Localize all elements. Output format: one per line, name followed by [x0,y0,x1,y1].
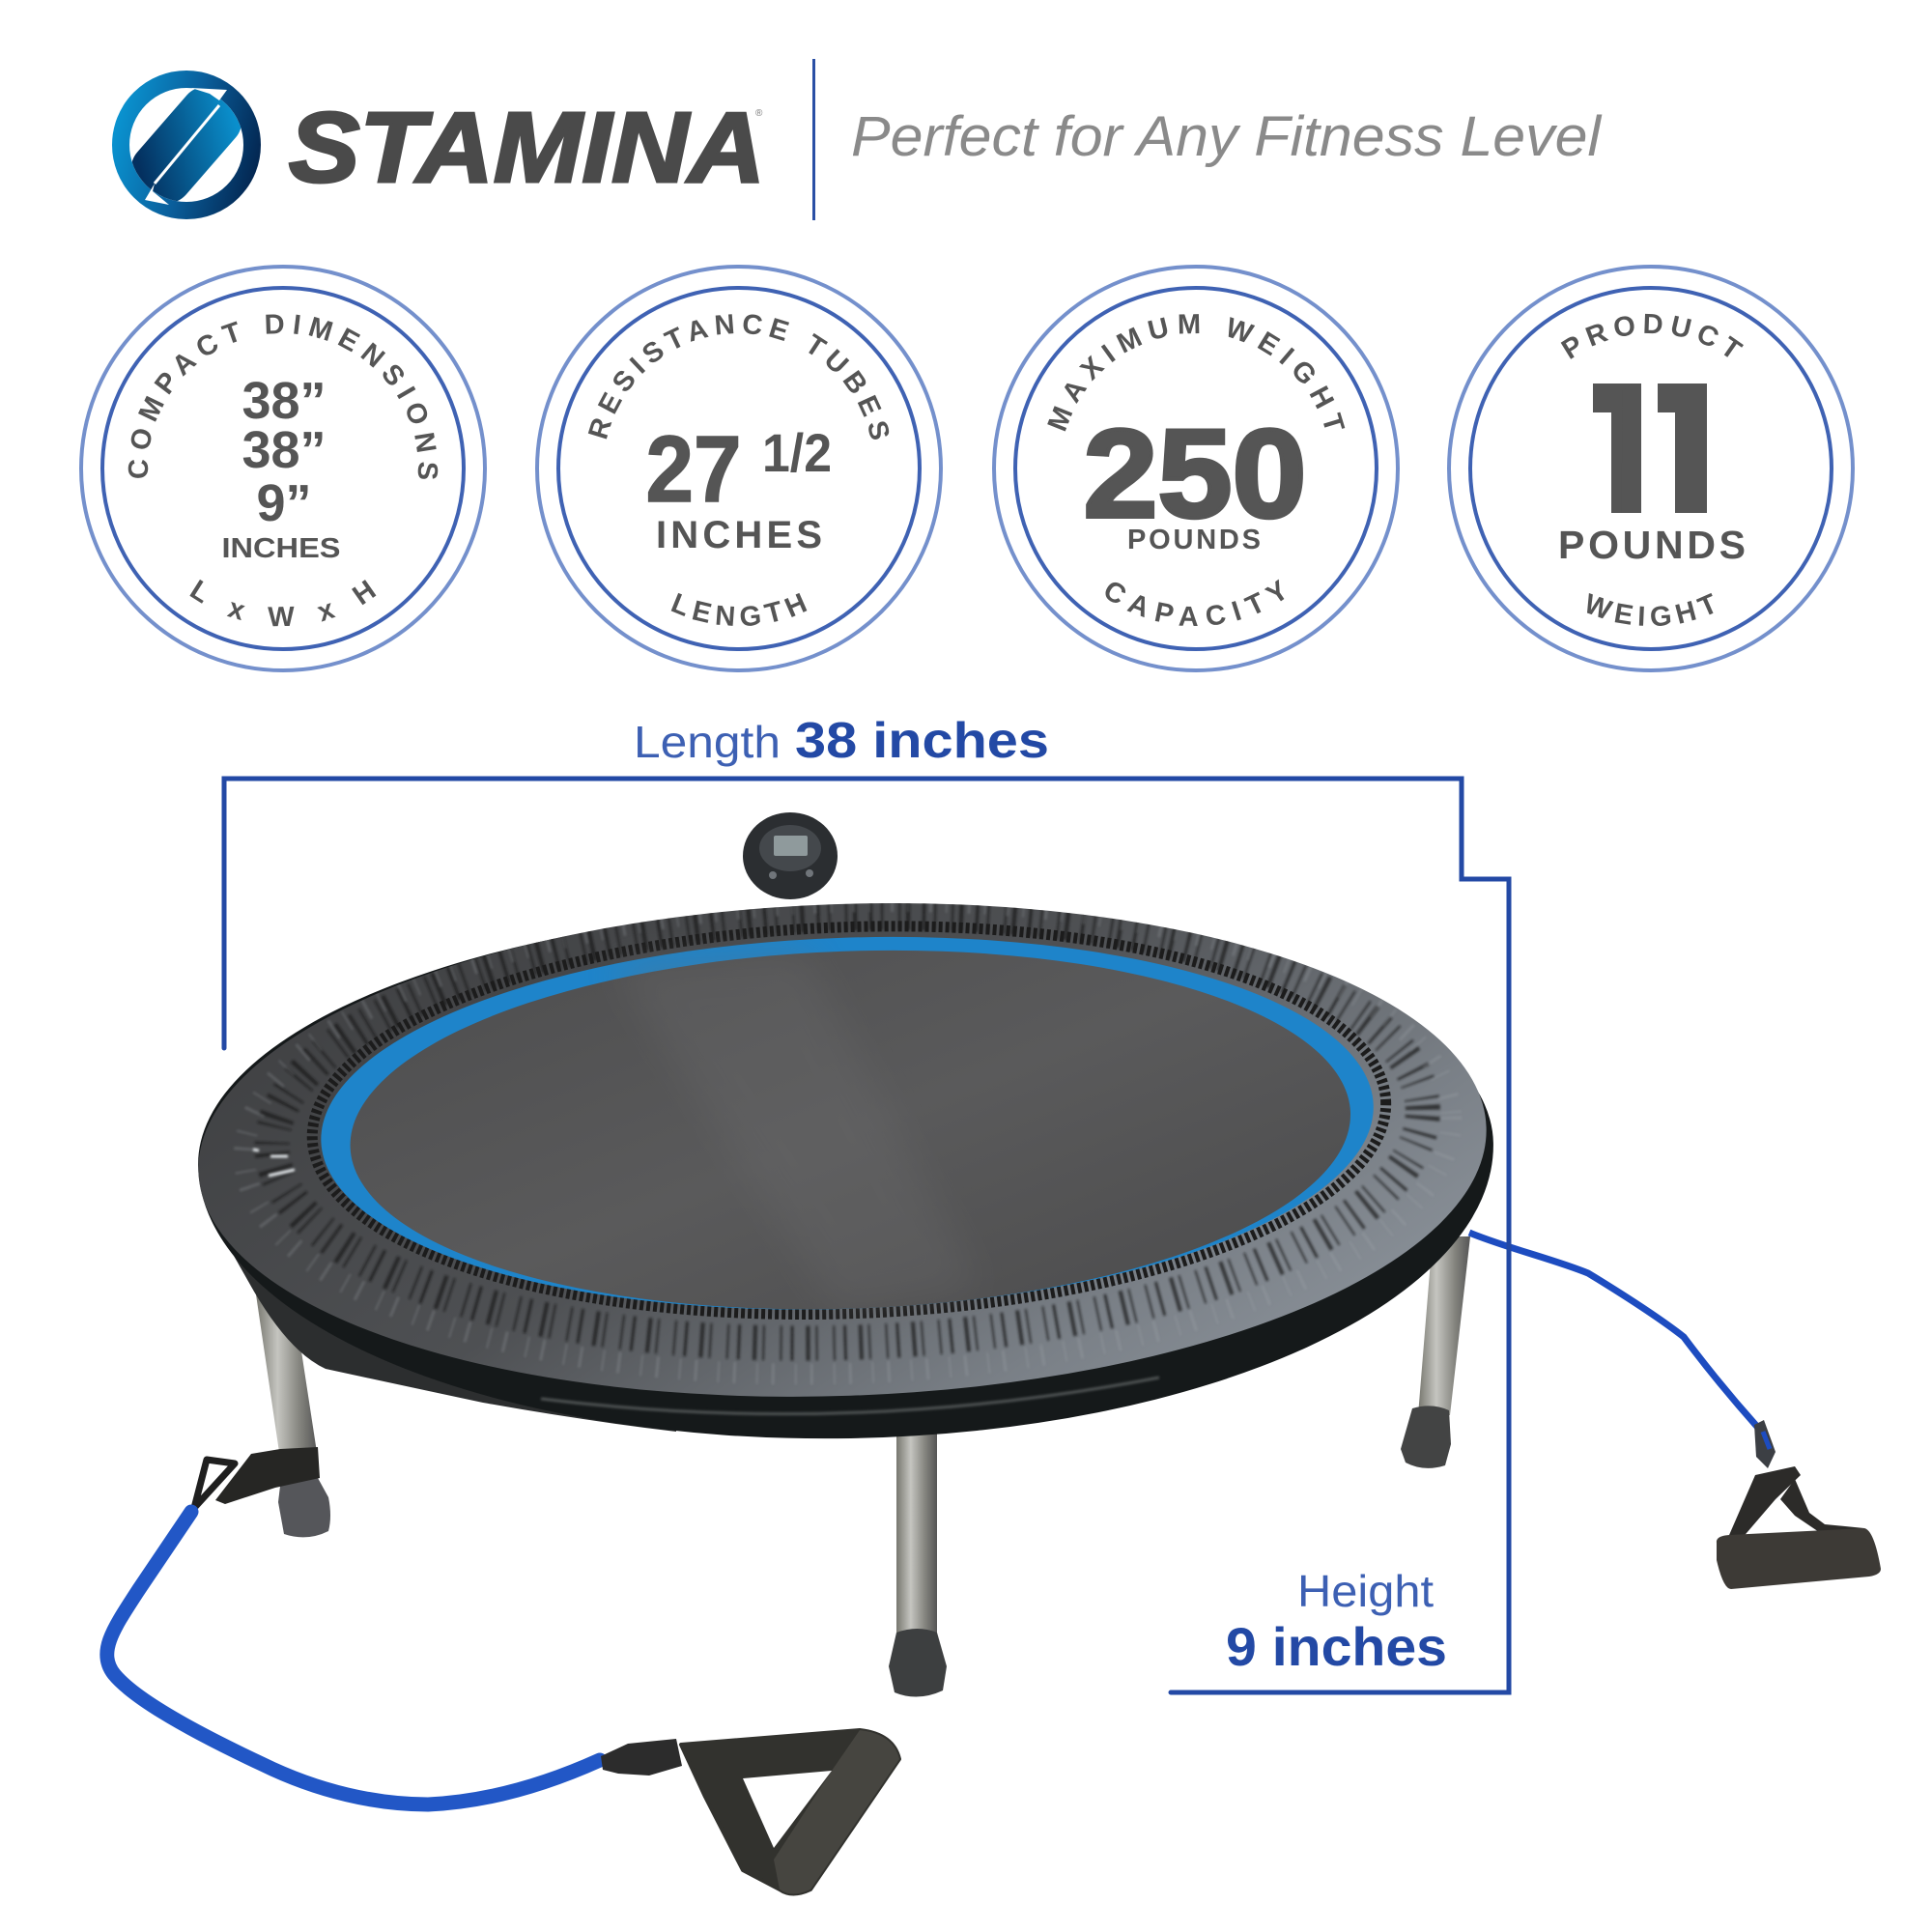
badge: product weight: WEIGHT [1587,593,1714,626]
length label: Length [634,717,781,767]
monitor [743,812,838,899]
resistance tube: right [1469,1233,1881,1589]
badge: resistance tubes: RESISTANCE TUBES [587,314,889,440]
badge: product weight: PRODUCT [1561,313,1744,359]
height value: 9 inches [1226,1616,1447,1677]
spring band [305,908,1393,1332]
badge: maximum weight: POUNDS [1127,525,1261,555]
badge: compact dimensions: 38” [242,421,327,479]
leg: left [256,1294,318,1459]
tilted top surface [189,880,1494,1418]
blue ring [315,920,1379,1327]
badge: compact dimensions: L x W x H [189,580,377,626]
height label: Height [1297,1566,1434,1616]
carabiner [194,1460,235,1508]
rim highlight [541,1378,1159,1414]
trampoline [189,812,1498,1697]
mat sheen [611,947,981,1321]
badge: resistance tubes: LENGTH [670,593,808,626]
logo wordmark: STAMINA [289,92,765,203]
badge: maximum weight [992,265,1400,672]
length bracket [224,779,1509,1692]
leg: right [1418,1236,1470,1415]
left handle strap [1726,1466,1801,1542]
length value: 38 inches [795,713,1049,769]
badge: product weight: 11 [1576,347,1740,549]
badge: compact dimensions: COMPACT DIMENSIONS [128,315,439,479]
leg: middle [896,1420,937,1637]
left cover flap [217,1227,676,1432]
cover highlights [253,1150,295,1176]
badge: compact dimensions [79,265,487,672]
rim [194,896,1498,1450]
leg strap [215,1447,320,1504]
handle strap [681,1730,899,1893]
badge: compact dimensions: 38” [242,372,327,430]
tagline: Perfect for Any Fitness Level [851,105,1603,168]
right handle strap [1780,1479,1864,1536]
badge: resistance tubes: 1/2 [762,422,832,483]
badge: resistance tubes: 27 [645,416,742,522]
logo icon [121,76,252,213]
badge: resistance tubes: INCHES [656,514,822,556]
foot: left [278,1474,330,1537]
foot: middle [889,1629,947,1697]
badge: product weight: POUNDS [1558,523,1746,567]
cover wrinkles [236,881,1460,1394]
badge: product weight [1447,265,1855,672]
mat [344,934,1356,1326]
resistance tube: left [107,1447,899,1893]
badge: compact dimensions: INCHES [222,533,340,564]
connector [1754,1420,1776,1468]
handle grip [774,1730,899,1893]
top cover [190,882,1494,1418]
registered mark: ® [755,108,763,119]
badge: maximum weight: CAPACITY [1105,580,1285,626]
badge: resistance tubes [535,265,943,672]
foot: right [1401,1406,1451,1468]
connector [601,1739,682,1776]
badge: maximum weight: MAXIMUM WEIGHT [1047,314,1345,431]
badge: maximum weight: 250 [1084,403,1306,544]
handle grip [1717,1528,1881,1589]
badge: compact dimensions: 9” [256,474,312,532]
header divider [812,59,815,220]
